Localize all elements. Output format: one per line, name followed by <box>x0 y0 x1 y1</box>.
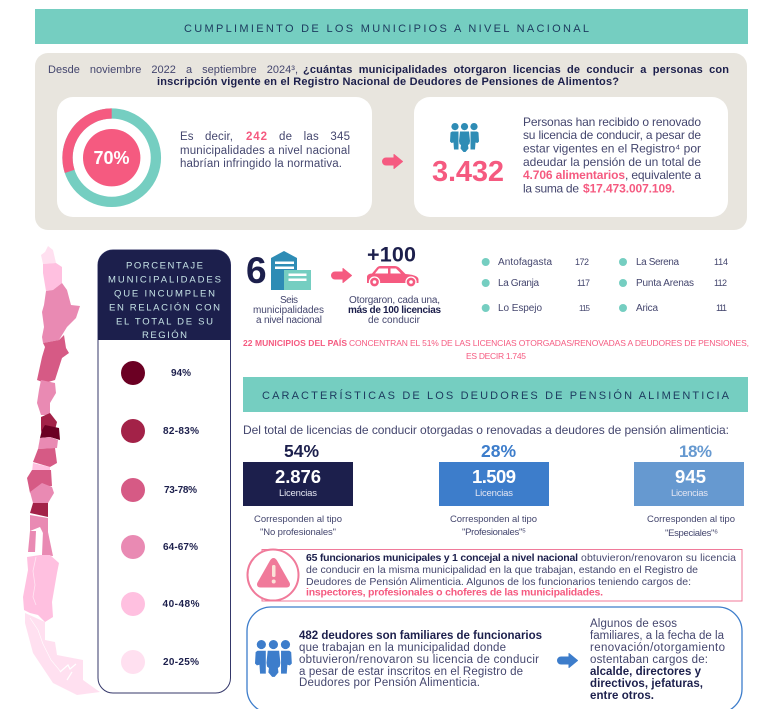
item Lo Espejo: 115 <box>579 304 591 313</box>
text: personas con licencia: la suma de <box>523 182 579 196</box>
text: funcionarios: obtuvieron/renovaron su licencia <box>581 552 736 564</box>
stat: more than 100 licenses: +100 <box>367 242 416 266</box>
stat: six municipalities: Seis <box>280 295 298 306</box>
text: cargos de familiares: entre otros. <box>590 690 654 702</box>
text: personas con licencia: estar vigentes en el Registro⁴ por <box>523 142 701 156</box>
text: funcionarios <box>306 552 736 598</box>
stat: 54% no profesionales: 54% <box>284 441 319 461</box>
item Punta Arenas: 112 <box>714 278 727 288</box>
panel: deudores familiares de funcionarios <box>247 607 742 709</box>
text: personas con licencia <box>523 115 701 196</box>
text: cargos de familiares: renovación/otorgamiento <box>590 642 725 654</box>
item Punta Arenas <box>619 278 727 289</box>
text: cargos de familiares: Algunos de esos <box>590 618 677 630</box>
stat: 54% no profesionales: Licencias <box>279 488 317 499</box>
question text: inscripción vigente en el Registro Nacional de Deudores de Pensiones de Alimentos? <box>157 76 619 88</box>
item Antofagasta: Antofagasta <box>498 257 552 268</box>
item La Granja: La Granja <box>498 278 539 289</box>
icon: car <box>367 266 418 287</box>
text: cargos de familiares <box>590 618 725 702</box>
text: 482 deudores: que trabajan en la municipalidad donde <box>299 642 506 654</box>
stat: more than 100 licenses: más de 100 licencias <box>348 305 441 316</box>
stat: 28% profesionales: Corresponden al tipo <box>450 514 537 525</box>
text: personas con licencia: , equivalente a <box>625 168 701 182</box>
text: 242 municipalidades: de las 345 <box>279 131 350 143</box>
callout: 22 municipios: CONCENTRAN EL 51% DE LAS LICENCIAS OTORGADAS/RENOVADAS A DEUDORES DE PENSIONES, <box>349 338 749 348</box>
stat: 54% no profesionales: 2.876 <box>275 466 321 487</box>
text: cargos de familiares: alcalde, directores y <box>590 666 702 678</box>
legend item 73-78% <box>121 478 197 502</box>
stat: more than 100 licenses: Otorgaron, cada una, <box>349 295 440 306</box>
callout: 22 municipios <box>243 338 749 361</box>
arrow: pink <box>383 154 402 168</box>
item La Serena <box>619 257 728 268</box>
stat: 28% profesionales: Licencias <box>475 488 513 499</box>
legend header: EL TOTAL DE SU <box>116 316 213 328</box>
legend item 64-67%: 64-67% <box>163 542 198 553</box>
stat: six municipalities <box>246 250 324 326</box>
stat: 18% especiales: 945 <box>675 466 706 487</box>
item Arica: Arica <box>636 303 658 314</box>
card: 3.432 personas: 3.432 <box>432 156 504 188</box>
legend item 82-83% <box>121 419 199 443</box>
text: personas con licencia: adeudar la pensión de un total de <box>523 155 701 169</box>
legend item 40-48%: 40-48% <box>162 599 200 610</box>
text: personas con licencia: $17.473.007.109. <box>583 182 675 196</box>
stat: 28% profesionales: "Profesionales"⁵ <box>462 527 526 538</box>
arrow: pink to +100 <box>332 268 352 282</box>
legend header: QUE INCUMPLEN <box>114 288 215 300</box>
question text: Desde noviembre 2022 a septiembre 2024³, <box>48 64 298 76</box>
stat: 54% no profesionales: "No profesionales" <box>260 527 336 538</box>
banner: caracteristicas de los deudores: CARACTERÍSTICAS DE LOS DEUDORES DE PENSIÓN ALIMENTICIA <box>262 389 730 402</box>
stat: 28% profesionales: 28% <box>481 441 516 461</box>
text: funcionarios: 65 funcionarios municipales y 1 concejal a nivel nacional <box>306 552 578 564</box>
legend item 40-48% <box>121 592 200 616</box>
callout: funcionarios municipales <box>248 550 742 601</box>
map of Chile by region <box>23 246 100 695</box>
text: cargos de familiares: ostentaban cargos de: <box>590 654 708 666</box>
callout: 22 municipios: ES DECIR 1.745 <box>466 351 526 361</box>
item Punta Arenas: Punta Arenas <box>636 278 694 289</box>
text: 242 municipalidades: municipalidades a nivel nacional <box>180 145 350 157</box>
legend header: EN RELACIÓN CON <box>109 302 220 314</box>
legend header <box>98 250 230 341</box>
banner: cumplimiento de los municipios <box>35 9 748 44</box>
icon: people <box>450 123 479 152</box>
text: personas con licencia: Personas han recibido o renovado <box>523 115 701 129</box>
intro text: del total de licencias: Del total de licencias de conducir otorgadas o renovadas a deudores de pensión alimenticia: <box>243 423 729 437</box>
legend header: PORCENTAJE <box>126 260 203 272</box>
item Antofagasta: 172 <box>575 257 589 267</box>
stat: six municipalities: municipalidades <box>253 305 324 316</box>
text: cargos de familiares: directivos, jefaturas, <box>590 678 703 690</box>
card: 3.432 personas <box>414 97 728 217</box>
legend item 20-25% <box>121 650 199 674</box>
stat: six municipalities: 6 <box>246 250 267 291</box>
text: funcionarios: de conducir en la misma municipalidad en la que trabajan, estando en el Registro de <box>306 564 698 576</box>
stat: 28% profesionales: 1.509 <box>472 466 516 487</box>
stat: 18% especiales <box>634 442 744 539</box>
text: 482 deudores: Deudores por Pensión Alimenticia. <box>299 677 480 689</box>
question text: ¿cuántas municipalidades otorgaron licencias de conducir a personas con <box>303 64 729 76</box>
question text <box>48 64 729 88</box>
legend item 64-67% <box>121 535 198 559</box>
item Antofagasta <box>482 257 589 268</box>
text: funcionarios: Deudores de Pensión Alimenticia. Algunos de los funcionarios teniendo cargos de: <box>306 576 691 588</box>
list: municipalities with more than 100 licenses <box>482 257 728 314</box>
text: 482 deudores: 482 deudores son familiares de funcionarios <box>299 630 542 642</box>
legend item 82-83%: 82-83% <box>163 426 199 437</box>
donut chart 70% <box>68 114 156 202</box>
arrow: blue <box>558 654 578 668</box>
item La Granja: 117 <box>577 278 590 288</box>
item Lo Espejo <box>482 303 591 314</box>
legend header: MUNICIPALIDADES <box>108 274 221 286</box>
text: cargos de familiares: familiares, a la fecha de la <box>590 630 725 642</box>
legend header: REGIÓN <box>142 330 187 341</box>
stat: 28% profesionales <box>439 441 549 538</box>
banner: caracteristicas de los deudores <box>243 377 748 412</box>
card: 70 percent <box>57 97 372 217</box>
stat: six municipalities: a nivel nacional <box>256 315 322 326</box>
text: funcionarios: inspectores, profesionales o choferes de las municipalidades. <box>306 586 603 598</box>
text: personas con licencia: su licencia de conducir, a pesar de <box>523 128 701 142</box>
legend panel: porcentaje municipalidades <box>98 250 230 693</box>
stat: 54% no profesionales: Corresponden al tipo <box>254 514 342 525</box>
stat: 18% especiales: Licencias <box>671 488 708 499</box>
stat: 18% especiales: Corresponden al tipo <box>647 514 735 525</box>
icon: warning <box>248 550 298 600</box>
donut chart 70%: 70% <box>93 148 130 168</box>
text: 482 deudores: a pesar de estar inscritos en el Registro de <box>299 666 523 678</box>
legend item 94%: 94% <box>171 368 191 379</box>
text: 242 municipalidades <box>180 131 350 170</box>
text: 242 municipalidades: 242 <box>246 131 267 143</box>
item Arica <box>619 303 727 314</box>
text: 482 deudores: obtuvieron/renovaron su licencia de conducir <box>299 654 539 666</box>
text: personas con licencia: 4.706 alimentarios <box>523 168 625 182</box>
item La Serena: 114 <box>714 257 728 267</box>
item La Granja <box>482 278 590 289</box>
stat: 18% especiales: 18% <box>679 442 712 461</box>
stat: more than 100 licenses <box>348 242 441 326</box>
callout: 22 municipios: 22 MUNICIPIOS DEL PAÍS <box>243 338 347 348</box>
legend item 73-78%: 73-78% <box>164 485 197 496</box>
icon: people blue <box>255 640 292 677</box>
stat: 54% no profesionales <box>243 441 353 538</box>
stat: 18% especiales: "Especiales"⁶ <box>665 528 718 539</box>
text: 242 municipalidades: Es decir, <box>180 131 233 143</box>
stat: more than 100 licenses: de conducir <box>368 315 421 326</box>
item Arica: 111 <box>716 303 727 313</box>
text: 242 municipalidades: habrían infringido la normativa. <box>180 158 342 170</box>
legend item 94% <box>121 361 191 385</box>
legend item 20-25%: 20-25% <box>163 657 199 668</box>
text: 482 deudores <box>299 630 542 689</box>
icon: buildings <box>271 251 311 290</box>
banner: cumplimiento de los municipios: CUMPLIMIENTO DE LOS MUNICIPIOS A NIVEL NACIONAL <box>184 23 589 35</box>
item La Serena: La Serena <box>636 257 679 268</box>
item Lo Espejo: Lo Espejo <box>498 303 542 314</box>
panel: pregunta y resultados nacionales <box>35 53 747 230</box>
